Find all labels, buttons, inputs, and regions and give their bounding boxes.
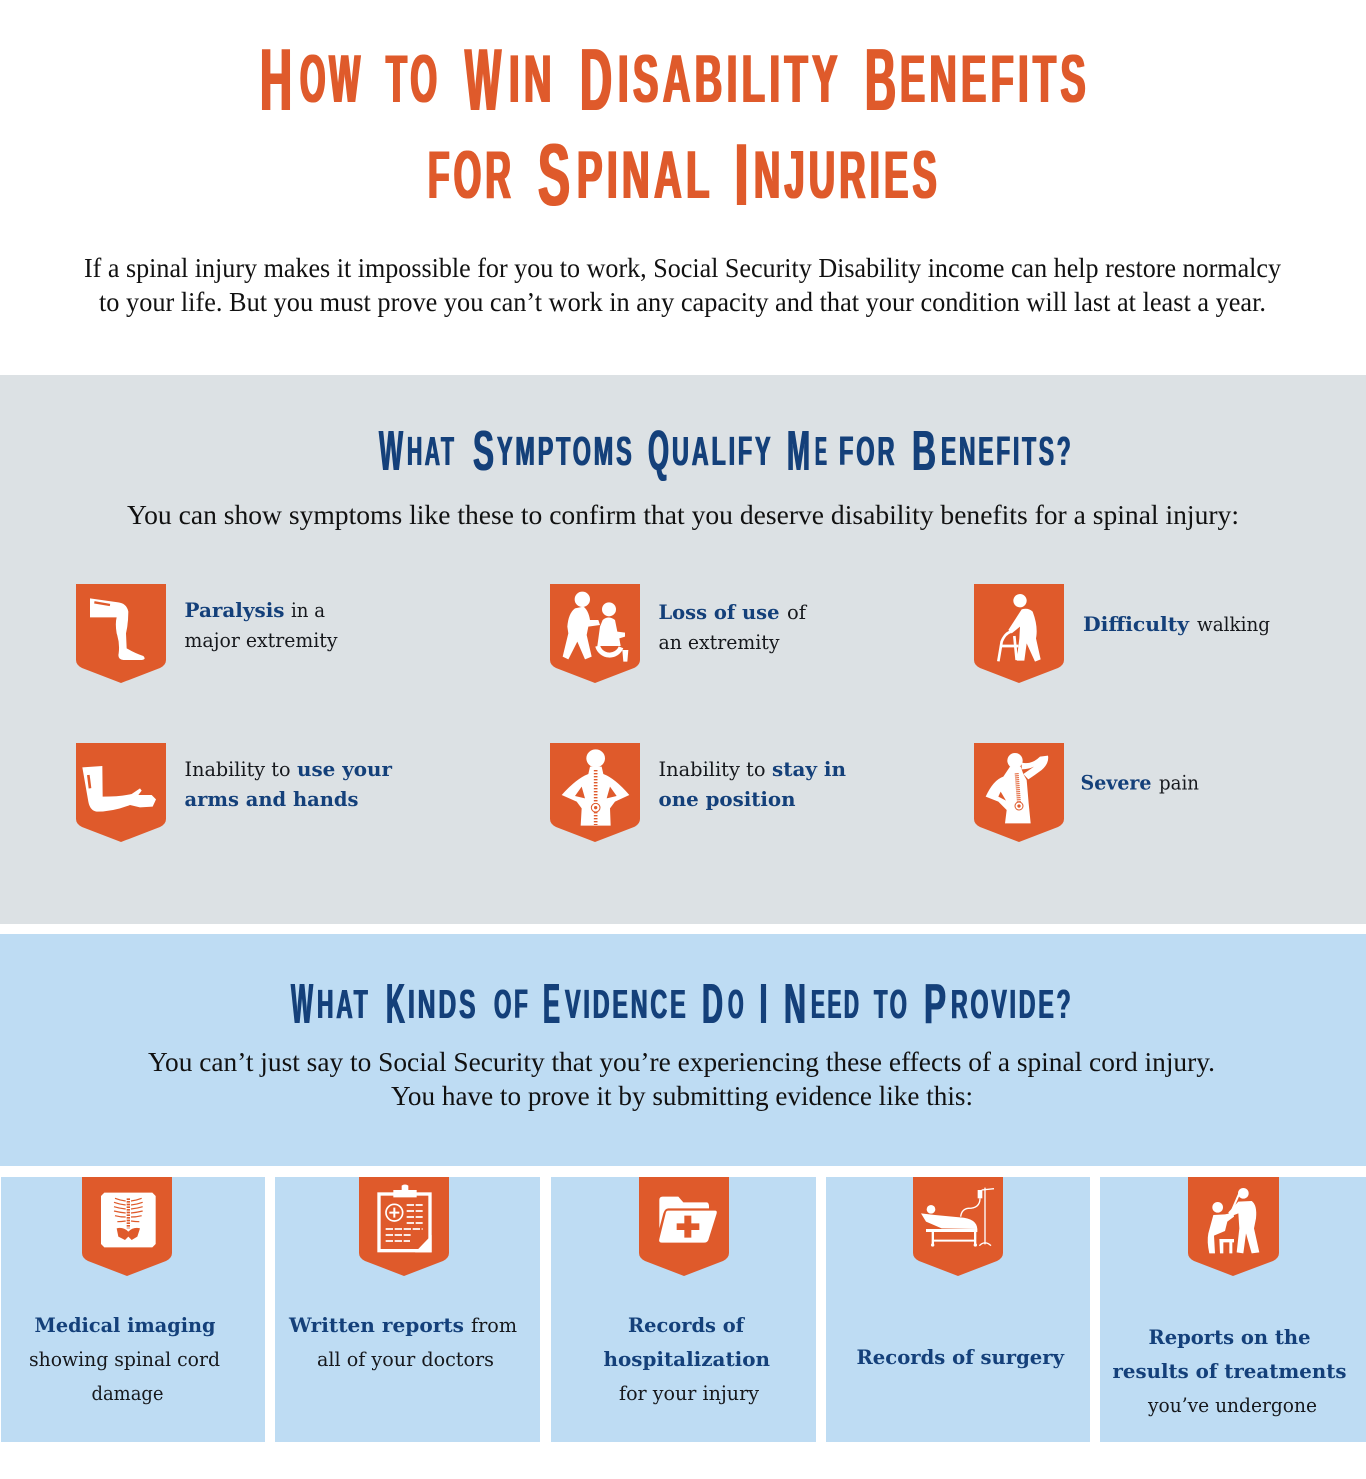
card: medical imaging — [1, 1177, 265, 1442]
icon: medical folder — [639, 1177, 729, 1276]
heading: evidence: O — [728, 981, 746, 1027]
heading: evidence: HAT — [317, 981, 370, 1027]
symptom: difficulty walking: Difficulty — [1083, 612, 1190, 636]
card: hospitalization — [551, 1177, 816, 1442]
text: surgery: Records of surgery — [856, 1345, 1065, 1369]
title: W — [465, 30, 501, 129]
symptom: stay in one position: Inability to — [658, 757, 766, 781]
symptom: paralysis: Paralysis — [184, 598, 284, 622]
title: OW — [300, 41, 364, 117]
heading: evidence: D — [702, 972, 723, 1036]
text: hospitalization: Records of — [628, 1313, 745, 1337]
panel: symptoms — [0, 375, 1366, 924]
title: D — [580, 30, 612, 129]
icon: therapist and patient — [1188, 1177, 1279, 1276]
heading: symptoms: S — [473, 419, 494, 483]
text: written reports: Written reports — [288, 1313, 464, 1337]
panel: evidence header — [0, 934, 1366, 1166]
heading: symptoms: UALIFY — [672, 428, 774, 474]
symptom: stay in one position: one position — [658, 787, 796, 811]
heading: symptoms: W — [379, 419, 403, 483]
heading: evidence: VIDENCE — [565, 981, 688, 1027]
evidence intro — [148, 1047, 1215, 1111]
symptom: arms and hands: arms and hands — [184, 787, 358, 811]
symptom: loss of use — [658, 600, 808, 654]
text: treatments: you’ve undergone — [1147, 1393, 1317, 1417]
intro paragraph: to your life. But you must prove you can’t work in any capacity and that your condition will last at least a year. — [99, 287, 1266, 317]
text: medical imaging: Medical imaging — [34, 1313, 216, 1337]
heading: evidence — [291, 972, 1074, 1036]
text: written reports — [288, 1313, 517, 1371]
evidence intro: You have to prove it by submitting evidence like this: — [391, 1081, 973, 1111]
heading: symptoms: ENEFITS? — [941, 428, 1074, 474]
heading: evidence: INDS — [408, 981, 478, 1027]
icon: leg — [76, 584, 166, 683]
title: S — [538, 125, 570, 224]
text: medical imaging — [29, 1313, 220, 1405]
icon: walker — [974, 584, 1064, 683]
text: hospitalization: hospitalization — [604, 1347, 770, 1371]
icon: hospital bed — [913, 1177, 1003, 1276]
text: treatments: results of treatments — [1112, 1359, 1346, 1383]
title: FOR — [428, 137, 515, 213]
heading: evidence: OF — [494, 981, 530, 1027]
title — [260, 30, 1090, 224]
intro paragraph: If a spinal injury makes it impossible for you to work, Social Security Disability income can help restore normalcy — [84, 253, 1281, 283]
icon: arm — [76, 743, 166, 842]
heading: evidence: P — [924, 972, 946, 1036]
title: NJURIES — [754, 137, 941, 213]
heading: symptoms: FOR — [839, 428, 898, 474]
card: surgery — [826, 1177, 1090, 1442]
heading: evidence: EED — [811, 981, 862, 1027]
symptom: paralysis — [184, 598, 338, 652]
title: IN — [509, 41, 556, 117]
heading: evidence: K — [386, 972, 405, 1036]
heading: evidence: W — [291, 972, 313, 1036]
evidence intro: You can’t just say to Social Security that you’re experiencing these effects of a spinal cord injury. — [148, 1047, 1215, 1077]
card: treatments — [1100, 1177, 1366, 1442]
card: written reports — [275, 1177, 540, 1442]
text: medical imaging: damage — [92, 1381, 164, 1405]
symptom: loss of use: of — [787, 600, 808, 624]
heading: symptoms: E — [815, 428, 829, 474]
icon: x-ray — [82, 1177, 172, 1276]
text: written reports: all of your doctors — [317, 1347, 494, 1371]
symptom: arms and hands: Inability to — [184, 757, 290, 781]
symptom: stay in one position: stay in — [772, 757, 846, 781]
icon: back pain — [974, 743, 1064, 842]
title: I — [734, 125, 748, 224]
symptom: paralysis: in a — [291, 598, 325, 622]
heading: evidence: I — [760, 972, 768, 1036]
title: TO — [386, 41, 441, 117]
title: H — [260, 30, 292, 129]
heading: symptoms: HAT — [407, 428, 456, 474]
heading: evidence: ROVIDE? — [951, 981, 1074, 1027]
symptom: stay in one position — [658, 757, 846, 811]
title: ENEFITS — [900, 41, 1090, 117]
icon: clipboard — [359, 1177, 449, 1276]
text: written reports: from — [471, 1313, 517, 1337]
heading: symptoms: YMPTOMS — [497, 428, 634, 474]
symptom: severe pain: Severe — [1080, 770, 1152, 794]
text: medical imaging: showing spinal cord — [29, 1347, 220, 1371]
text: hospitalization — [604, 1313, 770, 1405]
icon: wheelchair — [550, 584, 640, 683]
symptom: difficulty walking: walking — [1197, 612, 1270, 636]
symptom: loss of use: Loss of use — [658, 600, 780, 624]
heading: symptoms: Q — [648, 419, 669, 483]
symptom: difficulty walking — [1083, 612, 1270, 636]
heading: symptoms: B — [912, 419, 936, 483]
title: PINAL — [577, 137, 714, 213]
heading: evidence: N — [784, 972, 806, 1036]
text: hospitalization: for your injury — [619, 1381, 760, 1405]
heading: symptoms — [379, 419, 1074, 483]
heading: symptoms: M — [787, 419, 810, 483]
symptom: severe pain: pain — [1159, 770, 1199, 794]
symptom: arms and hands: use your — [297, 757, 392, 781]
symptom: loss of use: an extremity — [658, 630, 780, 654]
title: ISABILITY — [618, 41, 842, 117]
intro paragraph — [84, 253, 1281, 317]
symptom: severe pain — [1080, 770, 1199, 794]
heading: evidence: E — [543, 972, 560, 1036]
icon: back with spine — [550, 743, 640, 842]
heading: evidence: TO — [874, 981, 910, 1027]
symptom: arms and hands — [184, 757, 392, 811]
symptoms intro: You can show symptoms like these to confirm that you deserve disability benefits for a spinal injury: — [127, 500, 1239, 530]
symptom: paralysis: major extremity — [184, 628, 338, 652]
text: treatments — [1112, 1325, 1346, 1417]
title: B — [865, 30, 896, 129]
text: treatments: Reports on the — [1148, 1325, 1310, 1349]
